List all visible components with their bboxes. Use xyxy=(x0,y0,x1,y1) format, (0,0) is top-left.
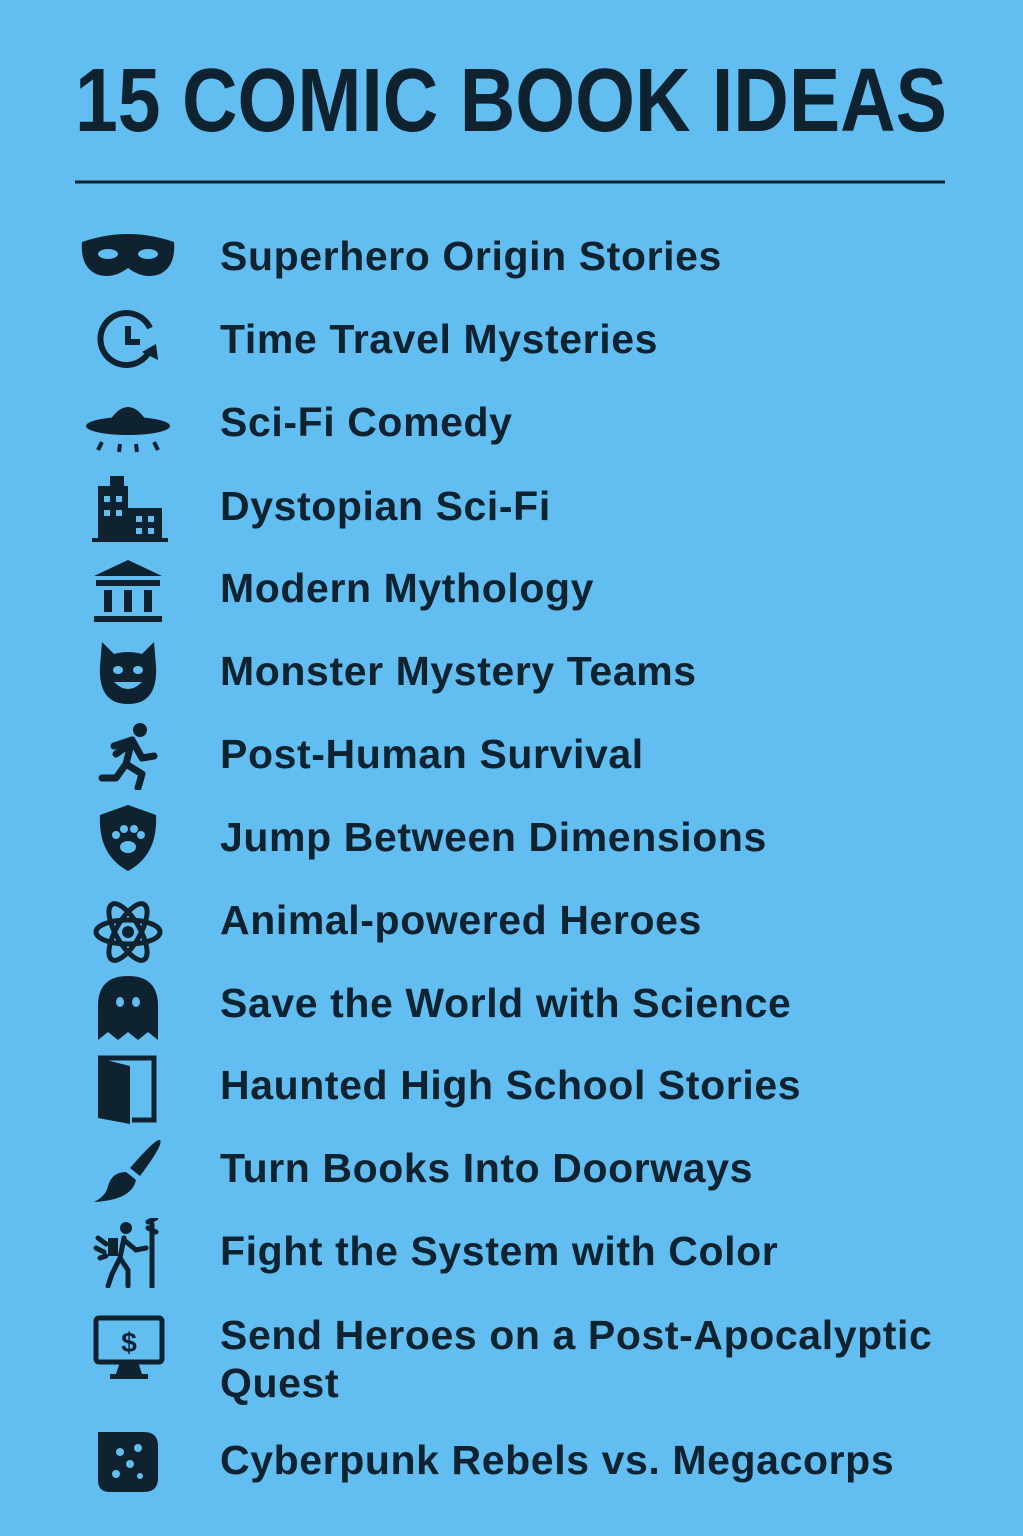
text 3: Sci-Fi Comedy xyxy=(220,399,513,445)
text 11: Haunted High School Stories xyxy=(220,1062,801,1108)
icon: buildings xyxy=(92,476,168,542)
icon: ghost xyxy=(98,976,158,1040)
text 1: Superhero Origin Stories xyxy=(220,233,722,279)
text 13: Fight the System with Color xyxy=(220,1228,778,1274)
text 9: Animal-powered Heroes xyxy=(220,897,702,943)
icon: temple xyxy=(94,560,162,622)
icon: atom xyxy=(94,901,162,963)
text 8: Jump Between Dimensions xyxy=(220,814,767,860)
icon: hiker xyxy=(94,1218,158,1288)
icon: door xyxy=(98,1056,156,1124)
text 4: Dystopian Sci-Fi xyxy=(220,483,551,529)
icon: shield paw xyxy=(100,805,156,871)
text 14: Send Heroes on a Post-Apocalyptic xyxy=(220,1312,932,1358)
icon: brush xyxy=(94,1140,161,1202)
text 7: Post-Human Survival xyxy=(220,731,644,777)
icon: mask xyxy=(82,234,174,276)
text 2: Time Travel Mysteries xyxy=(220,316,658,362)
icon: monster xyxy=(100,642,156,704)
text 6: Monster Mystery Teams xyxy=(220,648,697,694)
icon: cookie xyxy=(98,1432,158,1492)
icon: monitor dollar xyxy=(94,1316,164,1379)
icon: clock xyxy=(97,310,158,368)
icon: runner xyxy=(98,723,158,790)
text 10: Save the World with Science xyxy=(220,980,791,1026)
text 12: Turn Books Into Doorways xyxy=(220,1145,753,1191)
text 14 xyxy=(220,1312,932,1406)
text 15: Cyberpunk Rebels vs. Megacorps xyxy=(220,1437,894,1483)
text 14: Quest xyxy=(220,1360,339,1406)
icon: monitor dollar: $ xyxy=(121,1327,137,1358)
text 5: Modern Mythology xyxy=(220,565,594,611)
icon: ufo xyxy=(86,407,170,452)
